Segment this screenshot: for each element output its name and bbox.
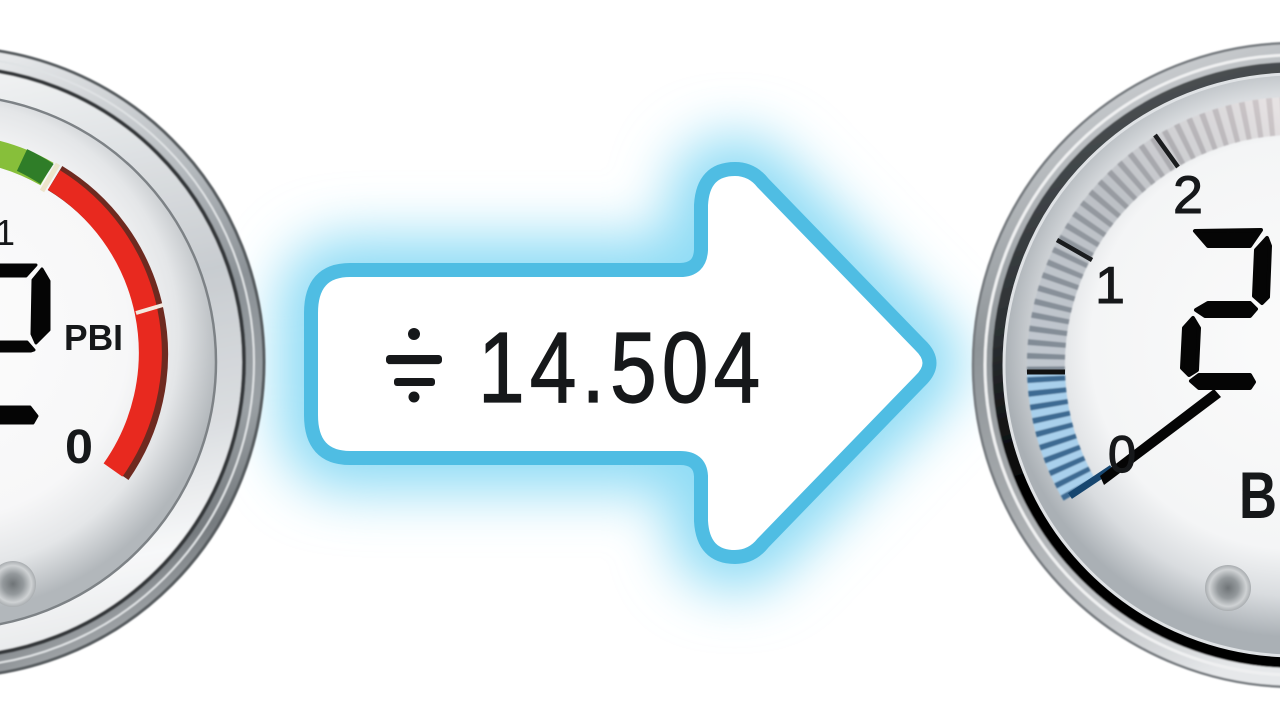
red scale arc <box>54 180 150 470</box>
grey tick band background <box>1046 116 1280 372</box>
scale ticks <box>1046 116 1280 491</box>
divide symbol: ÷ <box>385 304 442 416</box>
label 1: 1 <box>1095 257 1125 315</box>
scale separator top <box>42 164 58 191</box>
divisor value: 14.504 <box>478 311 760 424</box>
left gauge dial <box>0 95 216 629</box>
right gauge dial <box>1004 74 1280 656</box>
grey ticks <box>1046 116 1280 372</box>
digital digit left <box>0 265 49 423</box>
label 0: 0 <box>1108 426 1136 484</box>
label 2: 2 <box>1173 166 1203 225</box>
green arc dark end <box>22 160 47 174</box>
arrow <box>311 169 930 557</box>
digital digit right <box>1182 230 1270 388</box>
tick band background <box>1046 372 1080 491</box>
green scale arc <box>0 153 47 174</box>
left gauge <box>0 47 264 677</box>
major tick 1 <box>1057 240 1092 260</box>
blue ticks <box>1046 372 1080 491</box>
screw left <box>0 561 36 607</box>
right gauge bezel <box>973 43 1280 687</box>
label PBI: PBI <box>64 317 123 358</box>
arrow glow <box>311 169 930 557</box>
left gauge bezel <box>0 47 264 677</box>
major tick at half <box>1027 370 1065 374</box>
major tick 2 <box>1155 135 1178 167</box>
needle <box>1070 389 1221 496</box>
label 0: 0 <box>65 421 93 474</box>
screw right <box>1205 565 1251 611</box>
red arc shadow <box>55 178 154 472</box>
arrow outline <box>311 169 930 557</box>
scale separator right <box>136 305 163 313</box>
right gauge <box>973 43 1280 687</box>
